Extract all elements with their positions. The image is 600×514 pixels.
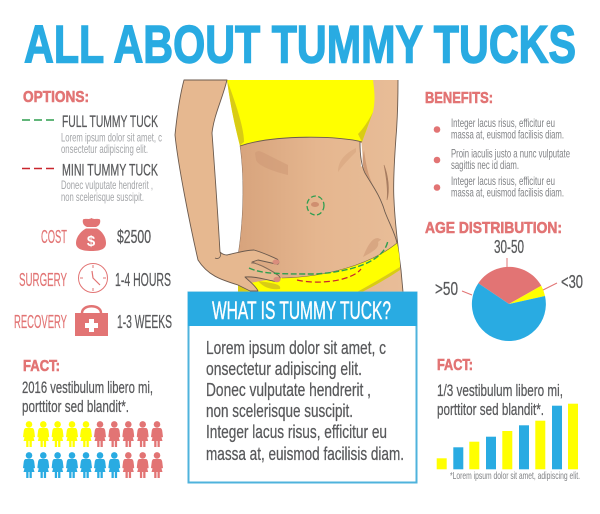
- stat: recovery: [14, 306, 172, 336]
- stat: cost: COST: [41, 227, 67, 247]
- legend: mini tummy tuck: [22, 160, 158, 204]
- heading: WHAT IS TUMMY TUCK?: [212, 297, 391, 325]
- stat: surgery: 1-4 HOURS: [115, 270, 171, 290]
- legend: full tummy tuck: [22, 112, 162, 156]
- benefit 2: [434, 146, 570, 172]
- legend: mini tummy tuck: Donec vulputate hendrerit ,: [61, 178, 153, 192]
- pie chart: [462, 258, 557, 341]
- body text: Lorem ipsum dolor sit amet, c: [206, 338, 386, 358]
- heading: options: OPTIONS:: [23, 89, 89, 106]
- fact text: [22, 378, 153, 416]
- fact text: porttitor sed blandit*.: [22, 397, 129, 416]
- legend: full tummy tuck: onsectetur adipiscing elit.: [61, 142, 148, 156]
- body text: onsectetur adipiscing elit.: [206, 359, 362, 379]
- stat: surgery: [19, 264, 171, 292]
- body text: [206, 338, 404, 464]
- pie labels: <30: [561, 272, 583, 292]
- panel: what is tummy tuck: [188, 292, 417, 482]
- torso and right arm: [232, 80, 403, 292]
- legend: mini tummy tuck: MINI TUMMY TUCK: [62, 160, 158, 180]
- fact text: porttitor sed blandit*.: [437, 400, 544, 419]
- full tuck incision: green dashes: [249, 240, 388, 274]
- legend: mini tummy tuck: non scelerisque suscipit.: [61, 190, 144, 204]
- mini tuck incision: red dashes: [297, 269, 361, 282]
- navel with green dashed circle: [307, 196, 324, 215]
- stat: cost: $2500: [117, 227, 151, 247]
- panel: age distribution: [425, 220, 583, 341]
- panel: options: [22, 89, 162, 204]
- skin shading: [255, 151, 288, 175]
- icon: first aid kit: [75, 306, 108, 336]
- panel: left fact: [22, 358, 163, 478]
- header band: [188, 292, 417, 326]
- left arm and hand: [175, 80, 280, 291]
- stat: recovery: 1-3 WEEKS: [117, 312, 172, 332]
- pie labels: 30-50: [494, 237, 524, 257]
- heading: benefits: BENEFITS:: [425, 90, 493, 107]
- panel: body illustration: [175, 80, 403, 292]
- stat: surgery: SURGERY: [19, 270, 67, 290]
- heading: fact: FACT:: [23, 358, 60, 375]
- stat: cost: [41, 218, 151, 251]
- panel: benefits: [425, 90, 570, 200]
- legend: full tummy tuck: FULL TUMMY TUCK: [62, 112, 158, 131]
- body text: non scelerisque suscipit.: [206, 401, 353, 421]
- yellow bottoms: [238, 243, 400, 292]
- white gap under right arm: [360, 143, 364, 168]
- body text: Donec vulputate hendrerit ,: [206, 380, 371, 400]
- pie labels: [435, 237, 583, 299]
- fact text: [437, 381, 563, 419]
- pictogram: women: [23, 421, 163, 478]
- fact text: 2016 vestibulum libero mi,: [22, 378, 153, 397]
- benefit 1: [434, 116, 564, 142]
- bar chart: [437, 404, 578, 469]
- legend: full tummy tuck: Lorem ipsum dolor sit amet, c: [61, 130, 162, 144]
- panel: right fact: [437, 357, 580, 482]
- icon: money bag: $: [87, 233, 96, 250]
- heading: fact: FACT:: [437, 357, 473, 374]
- body text: massa at, euismod facilisis diam.: [206, 444, 404, 464]
- body text: Integer lacus risus, efficitur eu: [206, 422, 387, 442]
- icon: clock: [78, 264, 108, 292]
- yellow top: [227, 80, 374, 146]
- heading: age distribution: AGE DISTRIBUTION:: [425, 220, 562, 237]
- stat: recovery: RECOVERY: [14, 312, 67, 332]
- pie labels: >50: [435, 279, 458, 299]
- benefit 2: sagittis nec id diam.: [451, 158, 519, 172]
- benefit 3: [434, 174, 564, 200]
